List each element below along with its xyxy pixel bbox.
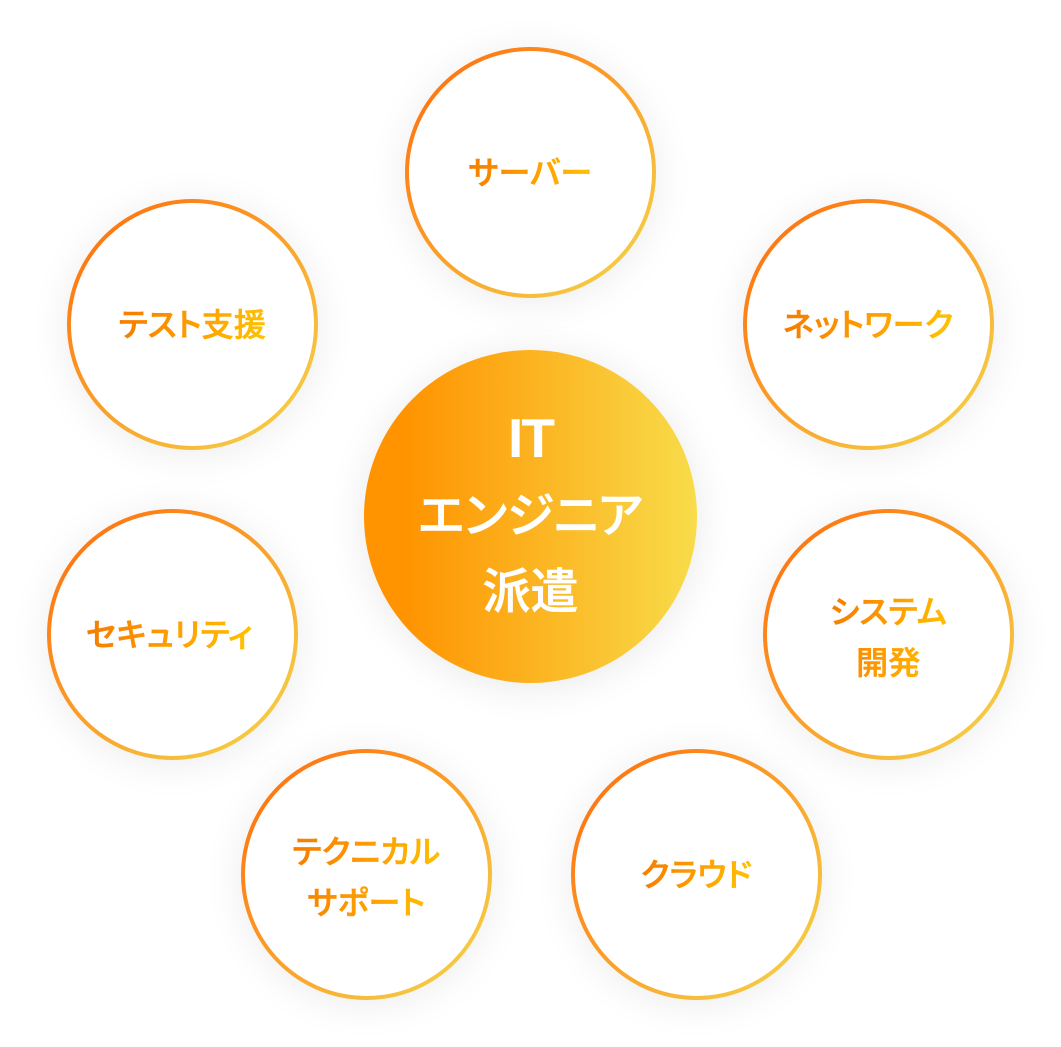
circle: test support <box>67 199 318 450</box>
circle: system development: システム <box>830 587 947 633</box>
circle: security <box>47 509 298 760</box>
circle: system development: 開発 <box>856 638 921 684</box>
circle: security: セキュリティ <box>86 610 253 656</box>
center circle: IT engineer dispatch: IT <box>508 406 553 468</box>
center circle: IT engineer dispatch: エンジニア <box>418 476 643 546</box>
center circle: IT engineer dispatch <box>364 350 697 683</box>
circle: technical support: テクニカル <box>292 827 440 873</box>
circle: test support: テスト支援 <box>119 300 266 346</box>
circle: technical support <box>241 749 492 1000</box>
circle: cloud: クラウド <box>641 850 752 896</box>
circle: server <box>405 47 656 298</box>
circle: technical support: サポート <box>307 878 425 924</box>
circle: network: ネットワーク <box>783 300 954 346</box>
circle: system development <box>763 509 1014 760</box>
circle: cloud <box>571 749 822 1000</box>
circle: server: サーバー <box>468 148 592 194</box>
circle: network <box>743 199 994 450</box>
center circle: IT engineer dispatch: 派遣 <box>482 552 578 622</box>
